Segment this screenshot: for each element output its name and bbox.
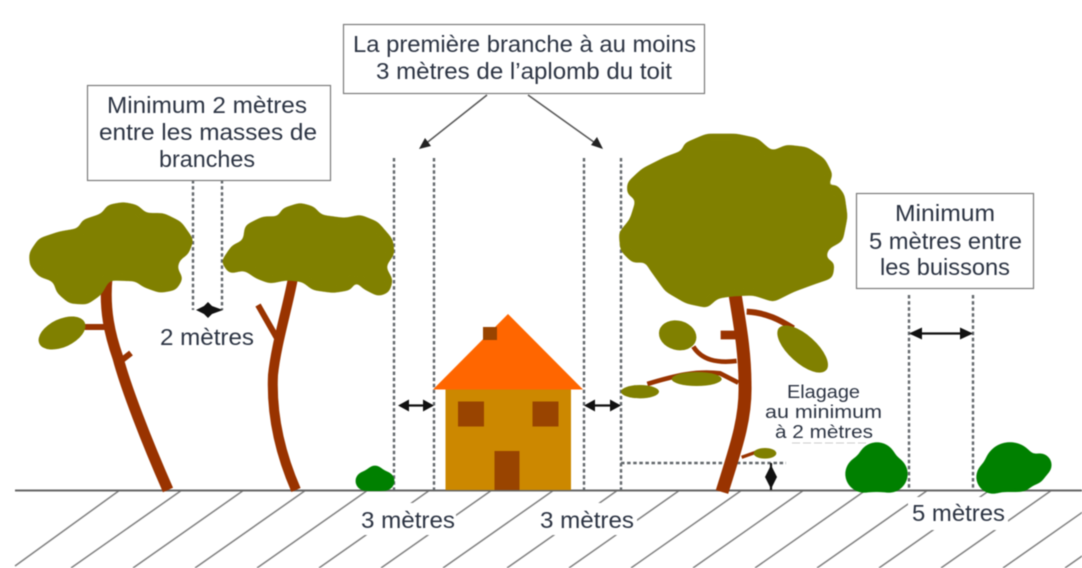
callout: first branch distance: 3 mètres de l’aplomb du toit bbox=[376, 58, 673, 84]
callout: first branch distance bbox=[344, 24, 704, 94]
arrow: 2 metres between canopies bbox=[196, 302, 223, 318]
callout: 2 metres between canopies: Minimum 2 mètres bbox=[107, 92, 307, 118]
dotted guides around house bbox=[394, 158, 621, 490]
callout: 2 metres between canopies: branches bbox=[159, 146, 255, 172]
callout: 5 metres between bushes: Minimum bbox=[895, 200, 995, 226]
label: 2 metres: 2 mètres bbox=[160, 324, 254, 350]
dotted guides between bushes bbox=[909, 295, 973, 490]
label: 3 metres left: 3 mètres bbox=[361, 507, 455, 533]
arrow: 5 metres between bushes bbox=[909, 328, 973, 340]
callout arrows from top box bbox=[419, 95, 603, 149]
right window bbox=[532, 402, 558, 426]
label: 5 metres: 5 mètres bbox=[912, 500, 1005, 526]
small bush left of house bbox=[355, 465, 395, 491]
dashed line for pruning height bbox=[621, 462, 786, 464]
label: pruning minimum 2 metres: Elagage bbox=[787, 382, 860, 402]
label: pruning minimum 2 metres: au minimum bbox=[765, 402, 882, 422]
label: 3 metres right: 3 mètres bbox=[540, 507, 634, 533]
big tree bbox=[621, 136, 846, 492]
arrow: 3 metres left of house bbox=[398, 400, 434, 412]
callout: 5 metres between bushes: 5 mètres entre bbox=[869, 228, 1022, 254]
callout: 5 metres between bushes bbox=[856, 194, 1034, 288]
label: pruning minimum 2 metres: à 2 mètres bbox=[775, 422, 873, 442]
label: pruning minimum 2 metres bbox=[765, 382, 882, 443]
bush 2 bbox=[845, 442, 908, 493]
chimney bbox=[483, 327, 497, 340]
bush 3 bbox=[976, 442, 1052, 494]
arrow: 3 metres right of house bbox=[584, 400, 621, 412]
arrow: 2 metres pruning height bbox=[765, 463, 777, 490]
house roof bbox=[433, 314, 583, 390]
door bbox=[494, 451, 520, 490]
tree 1 bbox=[31, 204, 192, 490]
tree 2 bbox=[223, 205, 393, 490]
left window bbox=[458, 402, 484, 426]
ground hatching bbox=[15, 490, 1082, 568]
house body bbox=[446, 389, 571, 490]
dotted guides between left trees bbox=[193, 180, 222, 310]
ground line bbox=[15, 490, 1082, 492]
callout: 2 metres between canopies bbox=[88, 86, 330, 180]
callout: 5 metres between bushes: les buissons bbox=[880, 254, 1010, 280]
callout: first branch distance: La première branche à au moins bbox=[353, 31, 696, 57]
callout: 2 metres between canopies: entre les masses de bbox=[99, 119, 317, 145]
house bbox=[433, 314, 583, 490]
